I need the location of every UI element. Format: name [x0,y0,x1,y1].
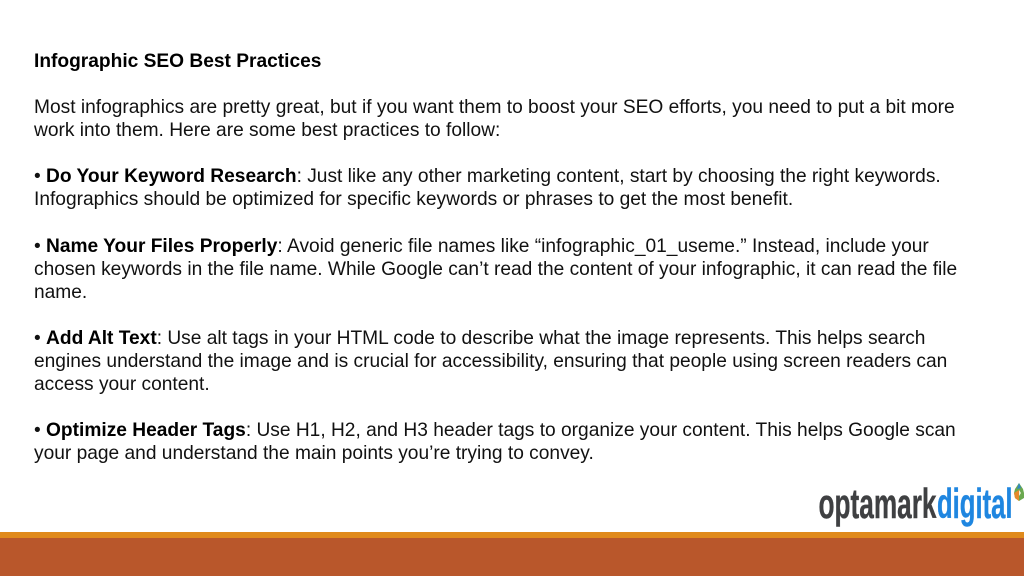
text block: keyword research [34,166,941,210]
icon: logo drop [1014,483,1024,501]
footer band: rust bar [0,538,1024,576]
text block: intro [34,97,955,141]
text block: intro: work into them. Here are some best practices to follow: [34,120,500,141]
text block: header tags [34,420,956,464]
text block: alt text: access your content. [34,374,210,395]
text block: header tags: your page and understand the main points you’re trying to convey. [34,443,594,464]
text block: file names [34,236,957,303]
text block: alt text [34,328,947,395]
text block: header tags: • Optimize Header Tags: Use H1, H2, and H3 header tags to organize your content. This helps Google scan [34,420,956,441]
title: Infographic SEO Best Practices [34,51,321,72]
text block: keyword research: Infographics should be optimized for specific keywords or phrases to get the most benefit. [34,189,793,210]
text block: alt text: • Add Alt Text: Use alt tags in your HTML code to describe what the image represents. This helps search [34,328,925,349]
text block: intro: Most infographics are pretty great, but if you want them to boost your SEO efforts, you need to put a bit more [34,97,955,118]
footer band: orange stripe [0,532,1024,538]
text block: file names: name. [34,282,87,303]
text block: keyword research: • Do Your Keyword Research: Just like any other marketing content, start by choosing the right keywords. [34,166,941,187]
text block: file names: • Name Your Files Properly: Avoid generic file names like “infographic_01_useme.” Instead, include your [34,236,929,257]
logo: optamarkdigital: optamark [818,480,937,527]
text block: file names: chosen keywords in the file name. While Google can’t read the content of your infographic, it can read the file [34,259,957,280]
text block: alt text: engines understand the image and is crucial for accessibility, ensuring that people using screen readers can [34,351,947,372]
